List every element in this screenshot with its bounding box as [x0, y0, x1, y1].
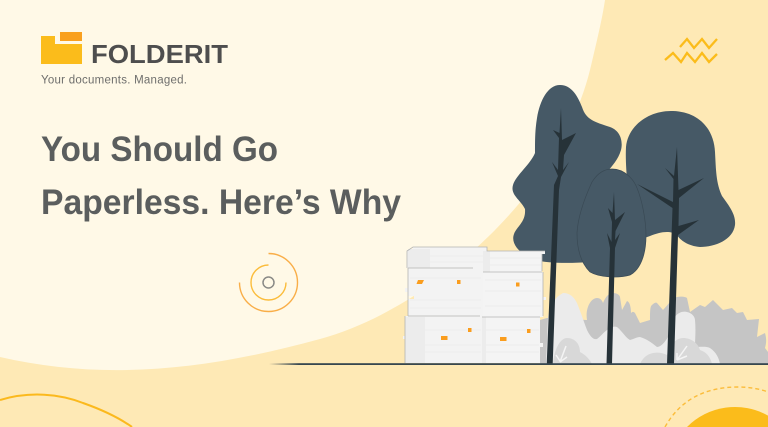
icon: folder — [41, 32, 82, 64]
trunk: right tree — [637, 147, 704, 364]
tree: left crown — [512, 85, 622, 263]
paper stack: right column — [482, 251, 546, 363]
tagline: Your documents. Managed. — [41, 74, 187, 86]
bush: pale front — [546, 293, 720, 364]
title: You Should Go — [41, 130, 278, 169]
bottom-left arc — [0, 395, 132, 427]
paper stack: left column — [403, 247, 487, 363]
logo — [41, 32, 228, 86]
trunk: left tree — [547, 108, 576, 364]
dashed orbit — [665, 387, 768, 427]
icon: zigzag lines — [665, 39, 717, 62]
cream background shape — [0, 0, 605, 370]
tree: middle crown — [577, 169, 646, 277]
paper stack outlines — [405, 247, 545, 363]
paper sheet lines — [407, 256, 541, 352]
paper stacks — [403, 247, 546, 363]
title: Paperless. Here’s Why — [41, 183, 402, 222]
icon: concentric circle arcs — [240, 254, 298, 312]
trunk: middle tree — [606, 192, 625, 364]
bush: twig marks — [556, 346, 687, 362]
orange tabs — [416, 280, 530, 341]
sun semicircle — [687, 407, 768, 427]
bush: small grey clumps — [553, 338, 712, 364]
paper sheet shading — [405, 249, 490, 363]
bush: grey back — [540, 293, 768, 364]
tree: right crown — [626, 111, 735, 247]
wordmark: FOLDERIT — [91, 39, 228, 69]
bushes — [540, 293, 768, 364]
title — [41, 130, 402, 222]
